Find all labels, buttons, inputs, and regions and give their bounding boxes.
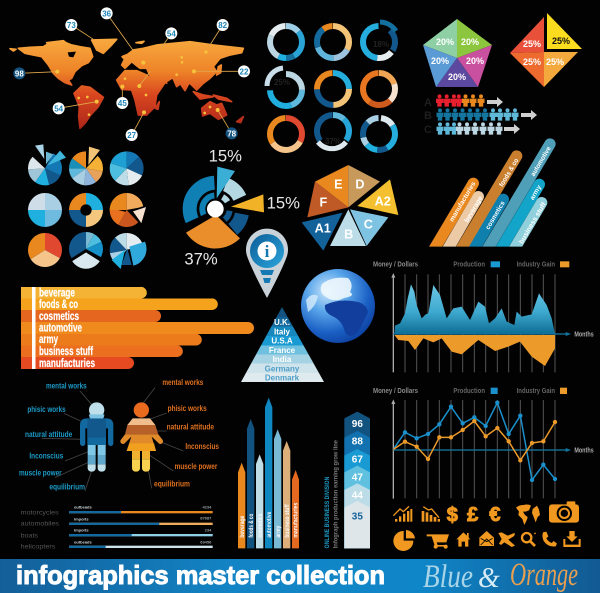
- value bubbles: 54: [167, 29, 176, 38]
- table row names: boats: [21, 532, 39, 539]
- row letters: B: [424, 110, 432, 122]
- pyramid labels: Germany: [265, 364, 300, 374]
- bars labels: foods & co: [39, 299, 78, 311]
- radial percentages: 15%: [209, 146, 242, 165]
- donut 2: [317, 26, 349, 58]
- radial percentages: 37%: [184, 250, 218, 269]
- slanted bar labels: business stuff: [518, 201, 548, 245]
- pyramid labels: [265, 318, 300, 382]
- globe land: [306, 278, 368, 336]
- row A figures: [436, 94, 484, 107]
- donut 1: [270, 26, 302, 58]
- hexagon letters: B: [344, 227, 353, 241]
- value bubbles: 45: [118, 99, 127, 108]
- area chart panel: [373, 259, 594, 372]
- male figure: [80, 402, 113, 472]
- radial percentages: [184, 146, 300, 269]
- x axis arrow: [393, 448, 571, 452]
- stacked values: 96: [352, 419, 363, 430]
- icon: magnifier: [522, 532, 536, 546]
- line legend swatches: [491, 388, 567, 394]
- rocket labels: business stuff: [285, 504, 291, 538]
- pin stripes: [260, 270, 274, 283]
- pyramid labels: Italy: [274, 328, 291, 336]
- line chart labels: Industry Gain: [517, 386, 555, 395]
- slanted bar labels: automotive: [530, 145, 553, 178]
- y axis: [391, 273, 395, 372]
- pentagon labels: 20%: [431, 56, 449, 66]
- stacked values: 44: [352, 491, 363, 502]
- area chart labels: Money / Dollars: [373, 259, 418, 268]
- stacked values: 35: [352, 512, 363, 523]
- icon: envelope: [479, 531, 494, 546]
- pie 8: [77, 240, 94, 257]
- icon: cart: [427, 534, 449, 549]
- icon: world: [516, 504, 540, 525]
- value bubbles: 82: [218, 21, 228, 30]
- bars labels: business stuff: [39, 346, 93, 358]
- table values: 63456: [200, 540, 212, 545]
- leader lines: [19, 13, 244, 135]
- pie 1: [36, 160, 53, 177]
- pie 4: [36, 201, 53, 218]
- info letter: i: [265, 242, 270, 261]
- female labels: natural attitude: [167, 421, 214, 431]
- female labels: muscle power: [175, 461, 218, 471]
- donut 8: [317, 115, 349, 147]
- hexagon letters: A2: [375, 194, 391, 208]
- value bubbles: 54: [54, 104, 64, 113]
- female figure: [120, 402, 163, 472]
- human figures panel: [19, 377, 219, 550]
- donut 7: [270, 118, 302, 150]
- production area: [394, 284, 555, 334]
- pyramid labels: France: [269, 346, 296, 355]
- bars labels: manufacturies: [39, 358, 95, 370]
- bars divider: [32, 287, 36, 369]
- hexagon letters: D: [355, 178, 365, 192]
- value bubbles: 36: [102, 9, 112, 18]
- value bubbles: 73: [67, 21, 76, 30]
- table values: 234: [205, 528, 212, 533]
- pyramid labels: Denmark: [265, 374, 300, 382]
- radial percentages: 15%: [267, 194, 300, 213]
- male labels: phisic works: [27, 404, 66, 414]
- row arrows: [487, 97, 537, 134]
- hudson bay cutout: [68, 52, 76, 57]
- donut 6: [363, 73, 395, 105]
- row B figures: [436, 108, 518, 121]
- pentagon labels: 20%: [466, 56, 484, 66]
- line chart labels: Production: [453, 386, 485, 395]
- hexagon letters: E: [334, 178, 343, 192]
- line chart labels: [373, 386, 594, 455]
- pie 5: [77, 201, 94, 218]
- row C figures: [436, 122, 502, 135]
- rocket column chart: [238, 398, 300, 548]
- line grid lines: [405, 400, 555, 498]
- diamond labels: 25%: [523, 39, 541, 49]
- slanted bar labels: foods & co: [498, 157, 520, 188]
- icon: plane: [498, 532, 515, 547]
- script tagline: [423, 557, 578, 593]
- hexagon letters: C: [364, 217, 373, 231]
- slanted bar labels: cosmetics: [485, 200, 507, 231]
- pyramid labels: U.K.: [274, 318, 290, 327]
- pie 2: [77, 160, 94, 177]
- slanted bar labels: manufacturies: [449, 181, 478, 223]
- diamond labels: 25%: [523, 57, 541, 67]
- hexagon letters: A1: [315, 222, 331, 236]
- female labels: mental works: [162, 377, 203, 387]
- male labels: muscle power: [19, 467, 62, 477]
- male labels: [19, 381, 87, 491]
- world map panel: [10, 7, 250, 141]
- leader lines: [42, 388, 183, 491]
- male labels: mental works: [46, 381, 87, 391]
- female labels: [154, 377, 219, 488]
- stacked vertical captions: [324, 440, 340, 548]
- row letters: A: [424, 97, 432, 109]
- donut charts grid: [267, 22, 396, 150]
- icon: download: [563, 531, 581, 547]
- table row names: motorcycles: [21, 509, 59, 516]
- donut 4 label: 25%: [274, 78, 290, 87]
- female labels: equilibrium: [154, 478, 190, 488]
- radial chart: [186, 167, 264, 249]
- area grid lines: [405, 274, 555, 372]
- map dots: [55, 50, 220, 116]
- pyramid labels: India: [273, 355, 292, 364]
- pentagon labels: 20%: [436, 37, 454, 47]
- value bubbles: 78: [227, 129, 237, 138]
- pie 8 exploded slice: [71, 252, 101, 269]
- industry gain area: [394, 335, 555, 366]
- pie chart grid and radial chart: [35, 144, 300, 269]
- radial rings: [190, 183, 242, 235]
- hexagon letters chart: [302, 165, 398, 251]
- icon: currency symbols: £: [467, 504, 478, 526]
- icon: camera: [549, 501, 579, 523]
- industry gain line: [393, 419, 557, 462]
- donut 3 label: 18%: [373, 40, 389, 49]
- icon: currency symbols: €: [489, 504, 501, 526]
- table captions: imports: [74, 516, 89, 521]
- hexagon letters: [315, 178, 391, 241]
- pie 9: [118, 241, 135, 258]
- male labels: Inconscius: [29, 451, 63, 461]
- globe: [301, 269, 375, 343]
- pie 7: [36, 241, 53, 258]
- pentagon labels: [431, 37, 484, 82]
- icon: phone: [542, 532, 557, 547]
- bars labels: cosmetics: [39, 311, 79, 323]
- row letters: [424, 97, 432, 136]
- donut 8 exploded arc: [318, 142, 346, 149]
- table row names: helicopters: [21, 543, 56, 550]
- table captions: outbeads: [74, 504, 92, 509]
- pie 6 exploded wedge: [132, 206, 147, 225]
- male labels: equilibrium: [49, 481, 85, 491]
- rocket labels: [240, 502, 300, 538]
- pie 3: [118, 160, 135, 177]
- icon: currency symbols: $: [447, 505, 458, 527]
- icon: home: [456, 532, 470, 547]
- rocket labels: automotive: [267, 511, 273, 538]
- male labels: natural attitude: [25, 429, 72, 439]
- rocket labels: foods & co: [249, 513, 255, 538]
- bars labels: army: [39, 334, 58, 346]
- table captions: outbeads: [74, 540, 92, 545]
- table values: 87687: [200, 515, 212, 520]
- female labels: Inconscius: [185, 441, 219, 451]
- icon: bars down: [422, 507, 440, 522]
- bars labels: beverage: [39, 288, 75, 300]
- value bubbles: 98: [15, 69, 24, 78]
- bars labels: automotive: [39, 322, 82, 334]
- icon set: [393, 501, 581, 551]
- donut 3: [363, 26, 395, 58]
- pentagon labels: 20%: [461, 37, 479, 47]
- donut 4: [270, 74, 302, 106]
- value bubbles: 22: [240, 67, 249, 76]
- radial orange sector: [186, 215, 240, 249]
- stacked values: 67: [352, 454, 363, 465]
- line chart labels: Money / Dollars: [373, 386, 418, 395]
- slanted bar labels: [449, 145, 553, 245]
- donut 9: [363, 118, 395, 150]
- area chart labels: [373, 259, 594, 338]
- pie 9 exploded wedges: [112, 242, 147, 269]
- stacked values: 47: [352, 472, 363, 483]
- icon: currency symbols: [447, 504, 501, 527]
- row letters: C: [424, 124, 432, 136]
- title banner: [0, 557, 600, 593]
- table captions: [74, 504, 92, 545]
- rocket labels: manufacturies: [294, 502, 300, 538]
- pie 2 exploded wedge: [88, 147, 100, 165]
- people rows A B C: [424, 94, 537, 136]
- title: infographics master collection: [16, 560, 385, 590]
- value bubbles: 27: [127, 131, 137, 140]
- table row names: [21, 509, 60, 550]
- slanted bar labels: army: [529, 184, 543, 201]
- slanted bar labels: beverage: [463, 195, 485, 224]
- rocket labels: beverage: [240, 515, 246, 538]
- pie 1 exploded wedges: [35, 144, 66, 166]
- map landmasses: [10, 39, 243, 128]
- value bubbles: [13, 7, 250, 141]
- donut 4 exploded arc: [267, 68, 283, 86]
- icon: bars up: [393, 506, 412, 522]
- x axis arrow: [393, 332, 571, 336]
- area chart labels: Industry Gain: [517, 259, 555, 268]
- horizontal bars chart: [21, 287, 254, 370]
- diamond 25% chart: [510, 13, 582, 87]
- production line: [393, 400, 557, 482]
- diamond labels: 25%: [546, 57, 564, 67]
- stacked arrow chart: [324, 412, 370, 548]
- radial yellow wedge: [231, 194, 264, 212]
- radial blue wedge: [217, 167, 235, 198]
- radial hub: [207, 201, 224, 217]
- hexagon letters: F: [319, 196, 327, 210]
- line chart panel: [373, 386, 594, 499]
- area legend swatches: [491, 261, 569, 267]
- donut 3 exploded arc: [380, 22, 396, 31]
- slanted bars chart: [432, 144, 553, 253]
- y axis: [391, 399, 395, 499]
- pyramid labels: U.S.A: [271, 336, 293, 346]
- stacked values: [352, 419, 363, 523]
- pie 6: [118, 201, 135, 218]
- diamond labels: 25%: [552, 36, 570, 46]
- rocket labels: cosmetics: [258, 513, 264, 538]
- stacked vertical captions: Infograph production earning grow line: [333, 440, 340, 548]
- pentagon 20% chart: [423, 19, 492, 87]
- stacked values: 88: [352, 437, 363, 448]
- pentagon labels: 20%: [448, 72, 466, 82]
- female labels: phisic works: [168, 403, 207, 413]
- diamond labels: [523, 36, 570, 67]
- donut 8 label: 37%: [325, 137, 341, 146]
- bars labels: [39, 288, 95, 370]
- area chart labels: Production: [453, 259, 485, 268]
- icon: pie: [393, 530, 415, 551]
- rocket labels: army: [276, 525, 282, 538]
- table captions: imports: [74, 528, 89, 533]
- stacked vertical captions: ONLINE BUSINESS DIVISION: [324, 476, 331, 548]
- donut 5: [317, 73, 349, 105]
- table values: 4234: [202, 504, 212, 509]
- progress table: [21, 504, 213, 550]
- table row names: automobiles: [21, 521, 60, 528]
- info pin: [246, 229, 288, 298]
- pyramid chart: [241, 307, 324, 382]
- table progress bars: [69, 511, 213, 548]
- table values: [200, 504, 212, 545]
